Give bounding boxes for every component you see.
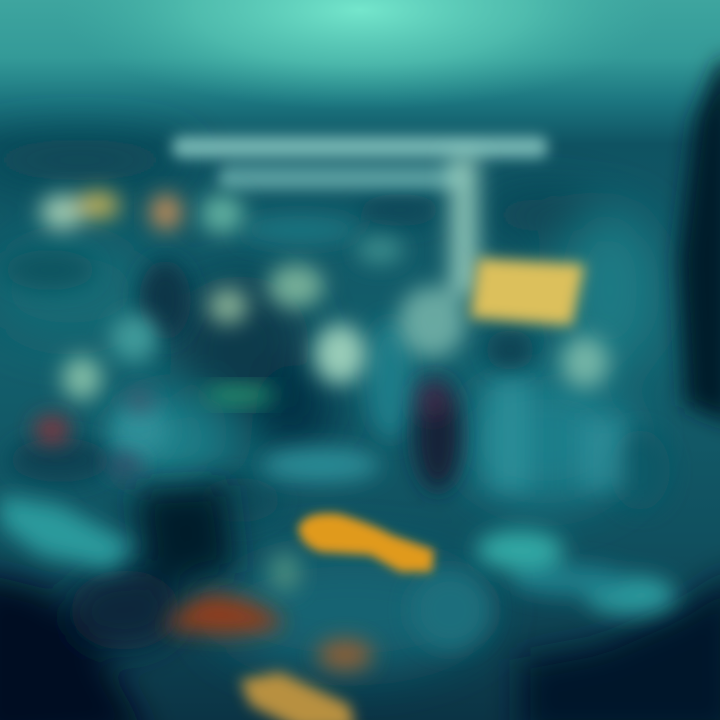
pale vertical tower (398, 155, 478, 358)
small red and purple spots (34, 388, 154, 474)
orange highlight (298, 513, 434, 572)
red-brown glow (165, 594, 373, 671)
sky glow (60, 0, 660, 110)
mottled texture patches (5, 194, 670, 650)
orange label (150, 194, 182, 230)
green streak (204, 386, 276, 404)
dark foreground bottom right (520, 570, 720, 720)
teal building columns (112, 380, 625, 490)
dark maroon tower (414, 379, 462, 491)
pale spot bottom (269, 552, 301, 592)
teal slabs right (476, 530, 676, 615)
yellow panel (470, 258, 585, 326)
pale spots (62, 194, 609, 400)
upper left pale and yellow label (40, 191, 120, 230)
dark city masses (0, 138, 660, 670)
pale headline band (172, 136, 548, 190)
orange bottom highlight (240, 672, 355, 720)
dark tower right (678, 60, 720, 425)
dark foreground bottom left (0, 485, 235, 720)
teal slab left (0, 495, 135, 570)
